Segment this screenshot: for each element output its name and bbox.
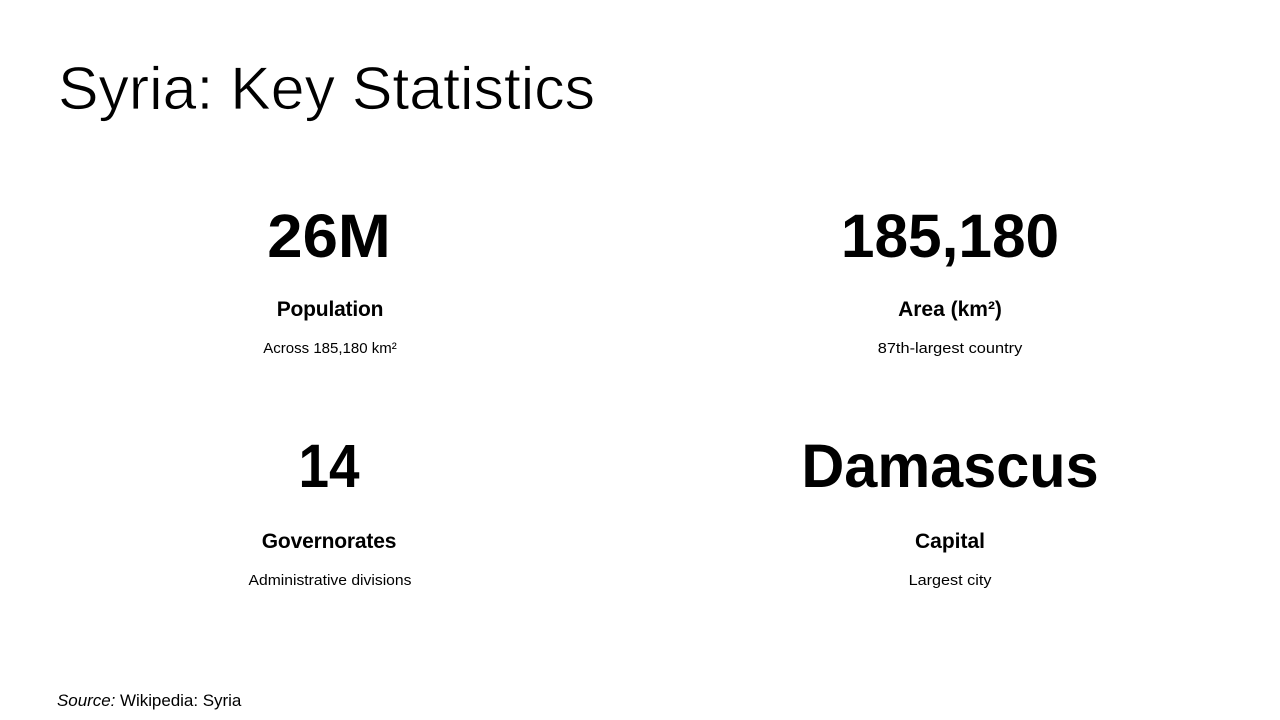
governorates label: Governorates bbox=[262, 530, 396, 553]
governorates note: Administrative divisions bbox=[249, 572, 411, 589]
area note: 87th-largest country bbox=[878, 340, 1022, 357]
governorates value: 14 bbox=[298, 432, 360, 500]
area value: 185,180 bbox=[841, 202, 1059, 270]
area label: Area (km²) bbox=[898, 298, 1002, 321]
capital label: Capital bbox=[915, 530, 985, 553]
population note: Across 185,180 km² bbox=[263, 340, 397, 357]
stat: capital bbox=[801, 432, 1099, 589]
stat: population bbox=[263, 202, 397, 357]
stat: area bbox=[841, 202, 1059, 357]
title: Syria: Key Statistics bbox=[58, 55, 595, 122]
population value: 26M bbox=[267, 202, 391, 270]
population label: Population bbox=[277, 298, 383, 321]
capital value: Damascus bbox=[801, 432, 1099, 500]
source: Source: Wikipedia: Syria bbox=[57, 691, 241, 710]
stat: governorates bbox=[248, 432, 411, 589]
capital note: Largest city bbox=[909, 572, 991, 589]
